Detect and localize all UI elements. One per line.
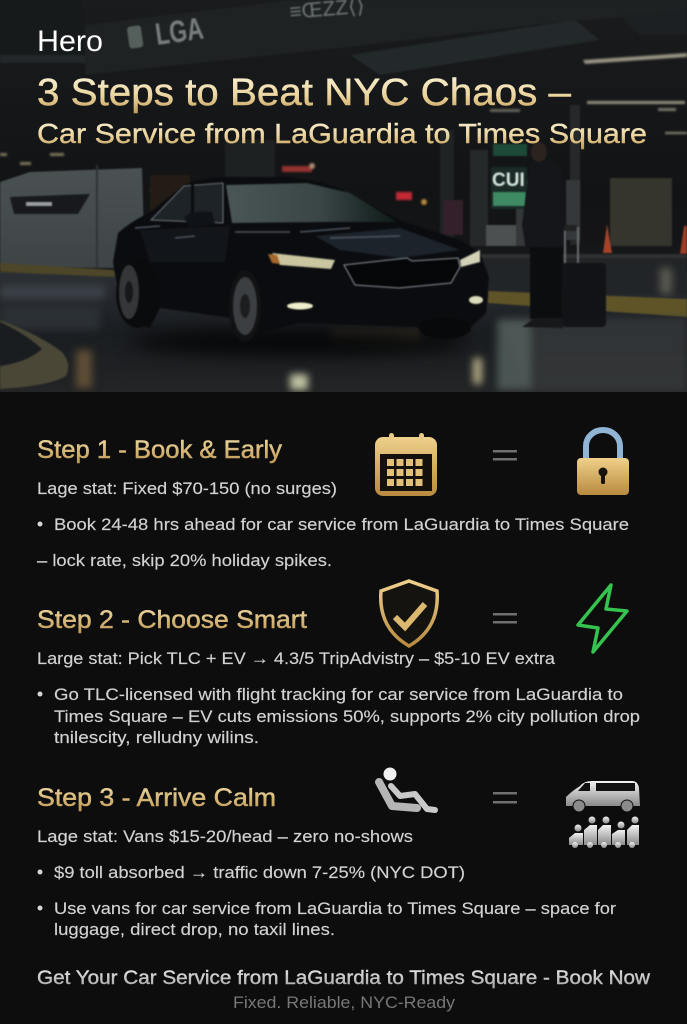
grille — [344, 258, 460, 288]
step 1 bullet text — [37, 515, 629, 570]
icon: van — [566, 781, 640, 812]
icon: equals — [493, 613, 517, 624]
hero label: Hero — [37, 25, 103, 58]
step 2 heading: Step 2 - Choose Smart — [37, 606, 307, 634]
icon: reclining passenger — [379, 768, 435, 810]
icon: equals — [493, 450, 517, 460]
step 2 bullet text: tnilescity, relludny wilins. — [54, 728, 259, 747]
step 1 bullet text: – lock rate, skip 20% holiday spikes. — [37, 551, 332, 570]
icon: lightning bolt — [578, 585, 627, 652]
glossy body streaks — [135, 226, 400, 238]
step 2 bullet text: Times Square – EV cuts emissions 50%, supports 2% city pollution drop — [54, 707, 640, 726]
airport signage — [127, 0, 365, 52]
hero photo: black sedan at LaGuardia with chauffeur — [0, 0, 687, 392]
ceiling lights — [0, 53, 687, 205]
step 2 bullet text: Go TLC-licensed with flight tracking for car service from LaGuardia to — [54, 685, 623, 704]
terminal back wall — [150, 175, 672, 250]
black sedan — [113, 177, 489, 342]
windshield — [226, 183, 397, 223]
road reflections — [0, 268, 687, 392]
hood highlight — [315, 228, 460, 258]
icon: padlock — [577, 430, 629, 495]
icon: calendar — [375, 433, 437, 496]
side mirror — [184, 212, 216, 224]
car shadow — [130, 328, 470, 356]
body side highlight — [140, 226, 230, 262]
footer tagline: Fixed. Reliable, NYC-Ready — [233, 993, 456, 1012]
traffic cones — [603, 224, 687, 254]
step 3 bullets: luggage, direct drop, no taxil lines. — [54, 920, 335, 939]
headlights — [272, 253, 335, 269]
green lit sign: CUI — [492, 170, 525, 191]
step 1 heading: Step 1 - Book & Early — [37, 436, 282, 464]
step 3 bullets: Use vans for car service from LaGuardia to Times Square – space for — [54, 899, 616, 918]
rear wheel — [116, 286, 144, 328]
green lit sign — [491, 144, 527, 209]
side windows — [151, 183, 223, 223]
icon: shield check — [381, 581, 437, 646]
step 2 bullet text — [38, 685, 640, 747]
icon: group of passengers — [569, 816, 639, 848]
step 1 stat: Lage stat: Fixed $70-150 (no surges) — [37, 479, 337, 498]
step 1 bullet text: Book 24-48 hrs ahead for car service from LaGuardia to Times Square — [54, 515, 629, 534]
step 3 bullets: $9 toll absorbed → traffic down 7-25% (NYC DOT) — [54, 863, 465, 882]
panel: step 3 — [37, 768, 640, 939]
subtitle: Car Service from LaGuardia to Times Square — [37, 118, 647, 149]
step 3 heading: Step 3 - Arrive Calm — [37, 784, 276, 812]
chauffeur — [522, 142, 566, 328]
panel: step 2 — [37, 581, 640, 747]
step 3 bullets — [38, 863, 616, 939]
wet road — [0, 272, 687, 392]
far front tyre — [420, 327, 471, 338]
front wheel — [230, 318, 248, 340]
step 2 stat: Large stat: Pick TLC + EV → 4.3/5 TripAdvistry – $5-10 EV extra — [37, 649, 556, 668]
terminal canopy structure — [0, 19, 598, 246]
main title — [37, 72, 647, 149]
airport signage: LGA — [153, 11, 206, 52]
far sidewalk — [0, 254, 687, 317]
concrete barrier — [0, 165, 145, 268]
footer call to action — [37, 968, 650, 1012]
fog lights — [287, 302, 313, 310]
icon: equals — [493, 792, 517, 804]
left curb corner — [0, 320, 68, 389]
step 3 stat: Lage stat: Vans $15-20/head – zero no-shows — [37, 827, 413, 846]
panel: step 1 — [37, 430, 629, 570]
suitcase — [562, 225, 606, 327]
main title: 3 Steps to Beat NYC Chaos – — [37, 72, 572, 114]
footer call to action: Get Your Car Service from LaGuardia to Times Square - Book Now — [37, 968, 650, 989]
